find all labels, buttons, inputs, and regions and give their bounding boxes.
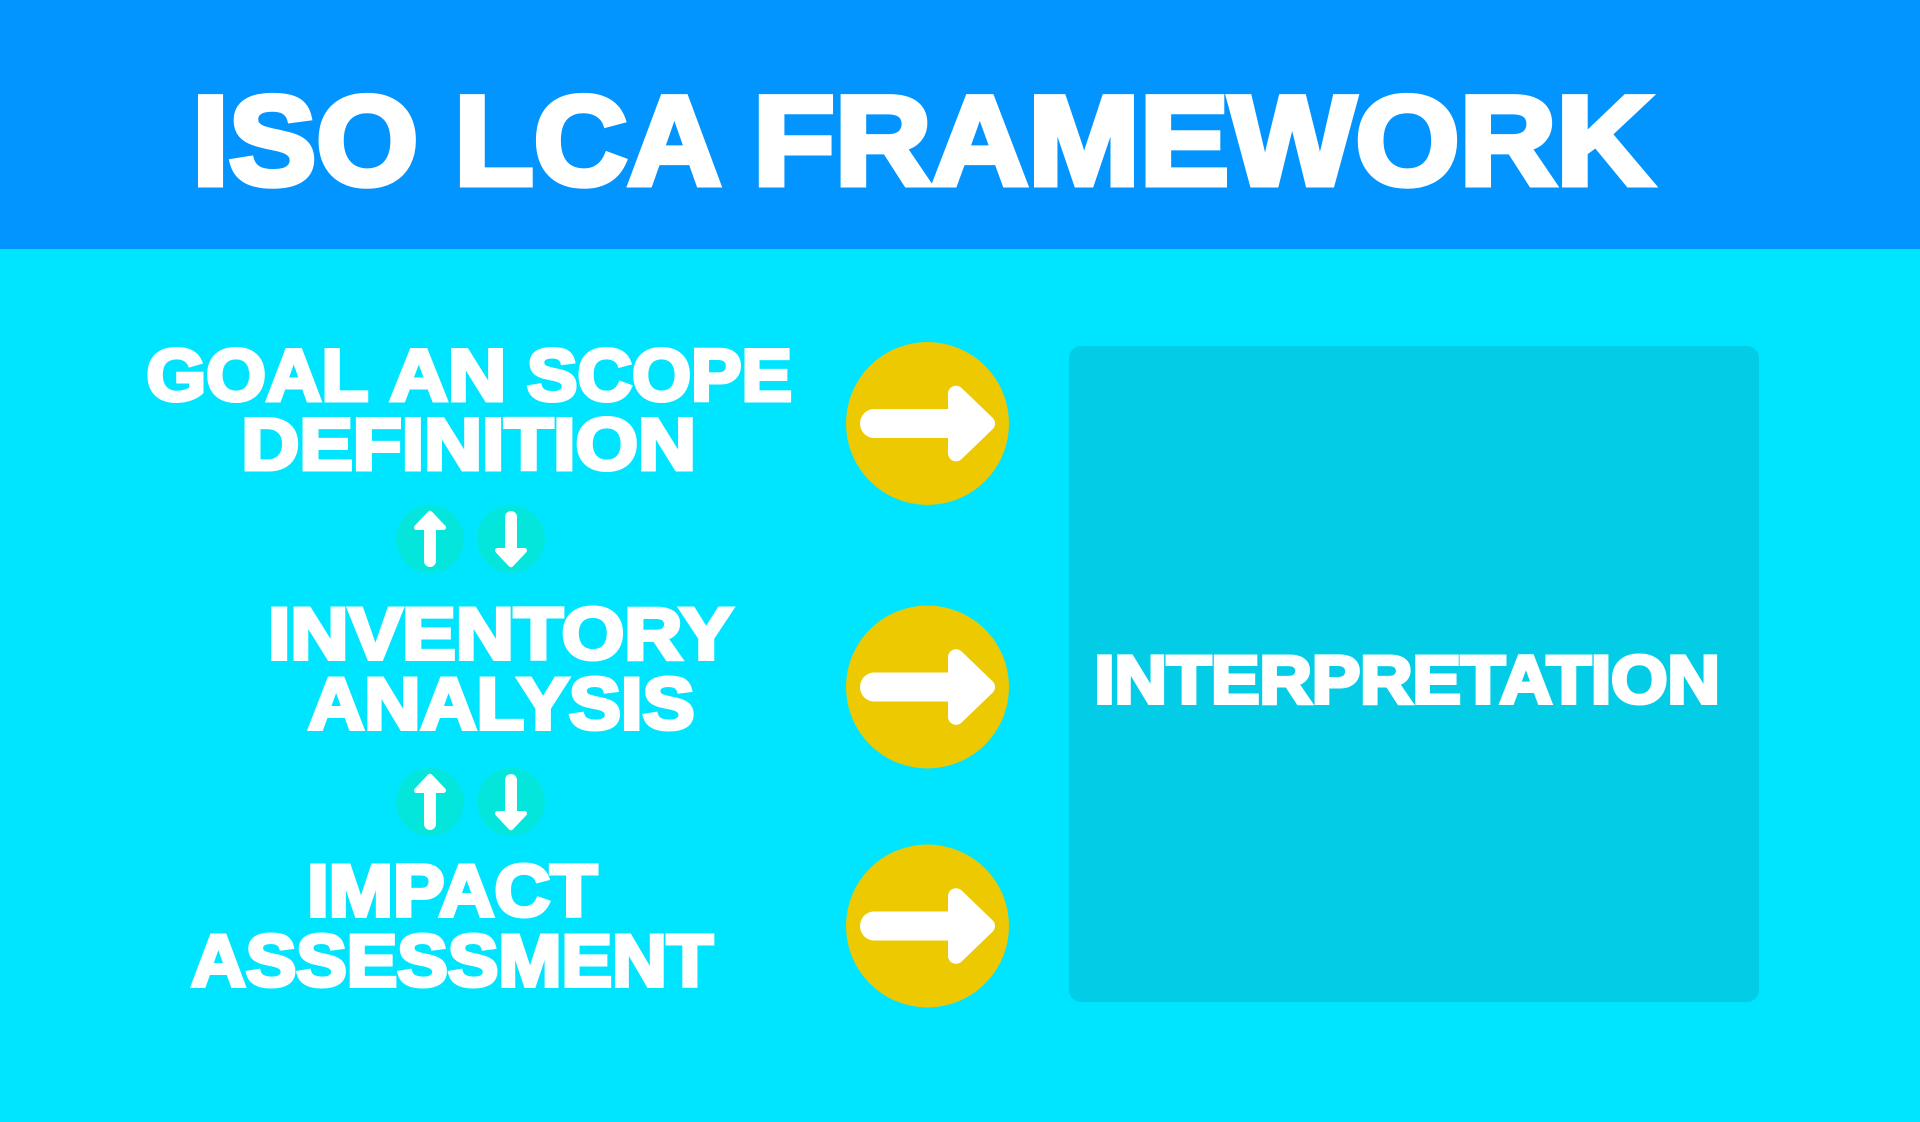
step label: goal and scope definition: GOAL [146, 336, 368, 417]
title [192, 70, 1653, 212]
step label: impact assessment [191, 851, 713, 1002]
icon: down arrow 2 [477, 768, 545, 836]
step label: inventory analysis [268, 594, 733, 745]
icon: yellow arrow circle 1 [846, 342, 1009, 505]
step label: goal and scope definition [146, 336, 792, 486]
icon: yellow arrow circle 3 [846, 844, 1009, 1008]
title: FRAMEWORK [753, 70, 1653, 212]
panel: interpretation [1069, 346, 1759, 1002]
icon: yellow arrow circle 2 [846, 606, 1009, 768]
step label: inventory analysis: ANALYSIS [308, 664, 694, 745]
title: LCA [454, 70, 721, 212]
icon: up arrow 2 [396, 768, 464, 836]
icon: down arrow 1 [477, 505, 545, 573]
panel label: interpretation: INTERPRETATION [1094, 642, 1720, 718]
step label: goal and scope definition: SCOPE [527, 336, 792, 417]
step label: inventory analysis: INVENTORY [268, 594, 733, 675]
step label: impact assessment: ASSESSMENT [191, 921, 713, 1002]
title: ISO [192, 70, 418, 212]
icon: up arrow 1 [396, 505, 464, 573]
header band [0, 0, 1920, 249]
step label: impact assessment: IMPACT [307, 851, 597, 932]
step label: goal and scope definition: DEFINITION [241, 405, 696, 486]
step label: goal and scope definition: AN [390, 336, 506, 417]
